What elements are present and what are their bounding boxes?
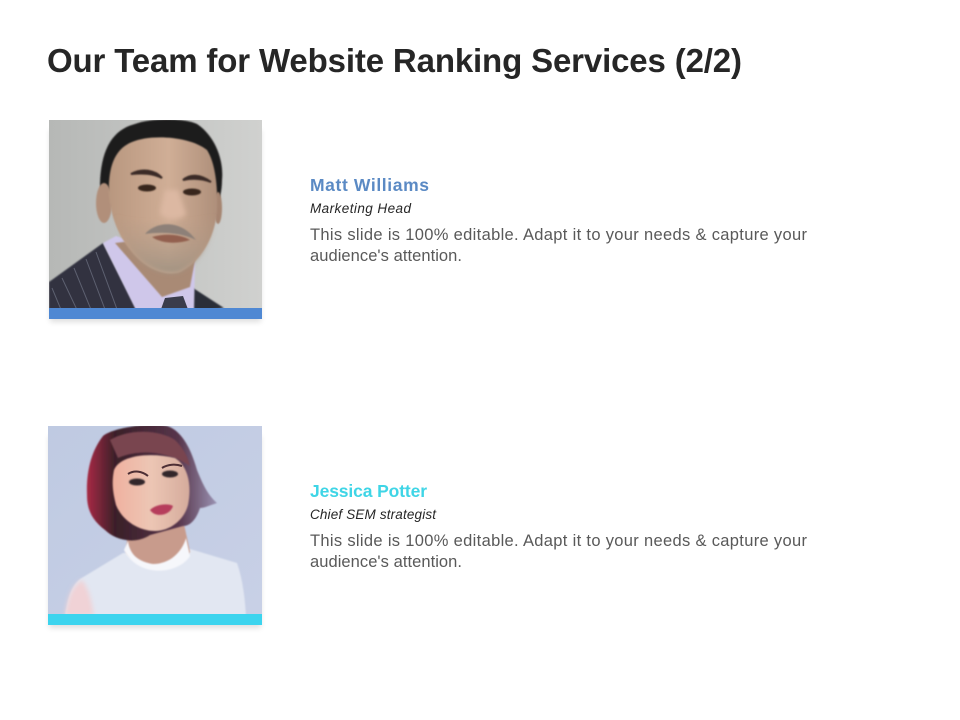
name: Matt Williams: Matt Williams: [310, 175, 429, 195]
title: Our Team for Website Ranking Services (2/2): [47, 42, 742, 79]
photo card: Matt Williams: [49, 120, 262, 322]
description: Jessica Potter: This slide is 100% editable. Adapt it to your needs & capture your: [310, 532, 808, 550]
role: Marketing Head: Marketing Head: [310, 201, 411, 216]
description: Matt Williams: This slide is 100% editable. Adapt it to your needs & capture your: [310, 226, 808, 244]
role: Chief SEM strategist: Chief SEM strategist: [310, 507, 437, 522]
description: Matt Williams: [310, 226, 808, 265]
description: Jessica Potter: [310, 532, 808, 571]
name: Jessica Potter: Jessica Potter: [310, 481, 427, 501]
panel: Matt Williams: [49, 120, 808, 322]
description: Jessica Potter: audience's attention.: [310, 553, 462, 571]
panel: Jessica Potter: [48, 425, 808, 628]
photo card: Jessica Potter: [48, 425, 262, 628]
description: Matt Williams: audience's attention.: [310, 247, 462, 265]
